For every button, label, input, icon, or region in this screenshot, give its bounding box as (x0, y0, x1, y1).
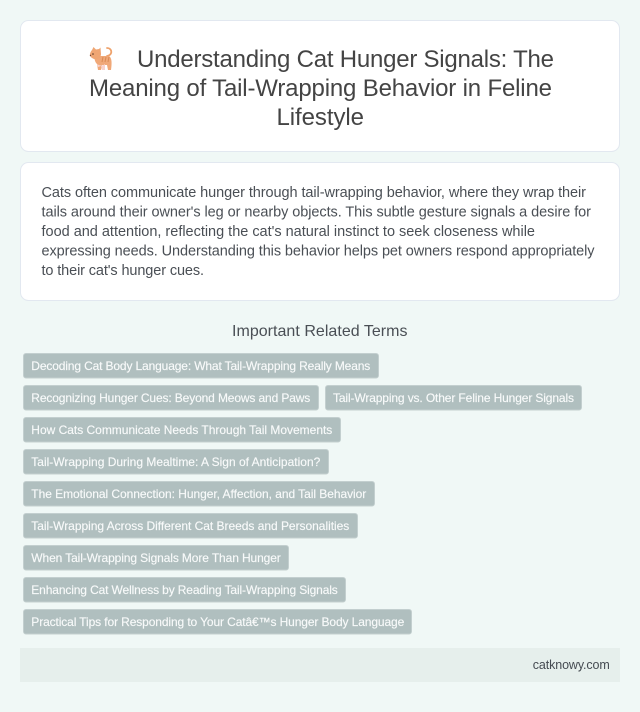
tag 9 (24, 578, 346, 602)
description text: expressing needs. Understanding this behavior helps pet owners respond appropriately (42, 244, 595, 260)
title: Meaning of Tail-Wrapping Behavior in Feline (89, 75, 552, 102)
tag 3 (326, 386, 582, 410)
description text: food and attention, reflecting the cat's natural instinct to seek closeness while (42, 224, 535, 240)
tag 2: Recognizing Hunger Cues: Beyond Meows and Paws (31, 391, 310, 405)
title: Lifestyle (276, 104, 364, 131)
title: Understanding Cat Hunger Signals: The (137, 46, 554, 73)
heading: related terms: Important Related Terms (232, 323, 408, 340)
tag 1: Decoding Cat Body Language: What Tail-Wrapping Really Means (31, 359, 370, 373)
tag 6: The Emotional Connection: Hunger, Affection, and Tail Behavior (31, 487, 366, 501)
description text: tails around their owner's leg or nearby objects. This subtle gesture signals a desire for (42, 204, 591, 220)
description text (42, 185, 595, 279)
tag 10: Practical Tips for Responding to Your Catâ€™s Hunger Body Language (31, 615, 405, 629)
panel: title card (20, 20, 620, 152)
footer (20, 648, 620, 682)
tag 4: How Cats Communicate Needs Through Tail Movements (31, 423, 332, 437)
icon: cat (90, 47, 112, 70)
tag 5 (24, 450, 328, 474)
tag list (24, 354, 582, 634)
tag 8: When Tail-Wrapping Signals More Than Hunger (31, 551, 281, 565)
tag 3: Tail-Wrapping vs. Other Feline Hunger Signals (333, 391, 574, 405)
tag 7: Tail-Wrapping Across Different Cat Breeds and Personalities (31, 519, 349, 533)
panel: description card (20, 162, 620, 300)
tag 6 (24, 482, 374, 506)
tag 1 (24, 354, 378, 378)
tag 10 (24, 610, 412, 634)
footer source text: catknowy.com (533, 658, 610, 672)
title (89, 46, 554, 131)
tag 9: Enhancing Cat Wellness by Reading Tail-Wrapping Signals (31, 583, 338, 597)
tag 7 (24, 514, 358, 538)
description text: Cats often communicate hunger through tail-wrapping behavior, where they wrap their (42, 185, 586, 201)
tag 4 (24, 418, 340, 442)
tag 8 (24, 546, 288, 570)
description text: to their cat's hunger cues. (42, 263, 204, 279)
tag 5: Tail-Wrapping During Mealtime: A Sign of Anticipation? (31, 455, 321, 469)
tag 2 (24, 386, 318, 410)
